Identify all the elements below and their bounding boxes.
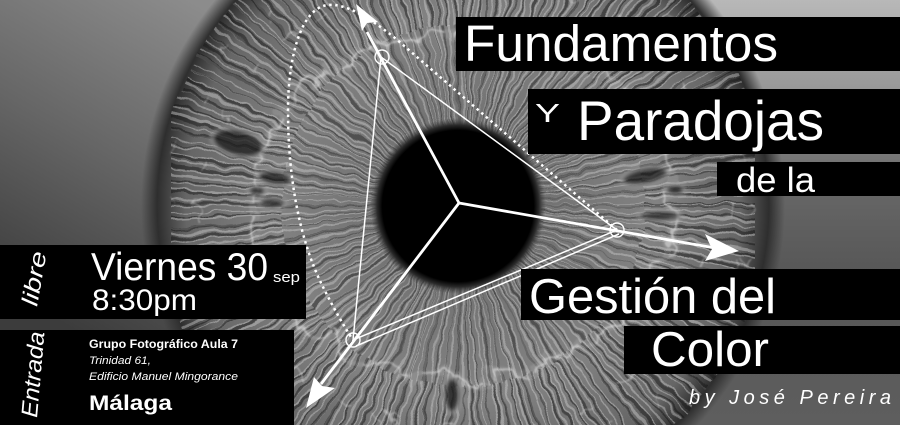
title bars [456,15,900,377]
arrowheads [306,4,739,408]
title: Color [624,323,900,377]
address: Trinidad 61, [89,355,151,367]
title: Y Paradojas [528,89,900,154]
title: Gestión del: Gestión del [529,270,776,324]
gamut triangle diagram [288,4,739,408]
vertex circles [346,50,624,347]
dotted gamut curve [288,5,617,340]
date panel: sep [273,269,300,286]
date: Viernes 30 [91,246,268,289]
vertical label: Entrada libre: libre [16,249,51,308]
title: Y Paradojas: Y [535,98,560,128]
axes [321,32,715,384]
title: de la [717,161,900,200]
title: de la: de la [736,161,816,200]
time: 8:30pm [92,284,197,317]
triangle outline [353,57,617,340]
title: Y Paradojas: Paradojas [577,89,824,152]
title: Color: Color [651,323,769,377]
venue panel: Edificio Manuel Mingorance [89,371,238,383]
pupil [370,118,546,294]
vertical label: Entrada libre: Entrada [16,330,49,418]
city: Málaga [89,392,172,415]
credit: by José Pereira: by José Pereira [689,387,891,409]
vertical label: Entrada libre [16,249,51,418]
double edge [356,234,619,346]
venue name: Grupo Fotográfico Aula 7 [89,339,238,351]
venue panel [0,330,294,425]
date panel [0,245,306,319]
title: Gestión del [521,269,900,324]
title: Fundamentos: Fundamentos [464,15,778,72]
iris crypts [208,123,685,413]
